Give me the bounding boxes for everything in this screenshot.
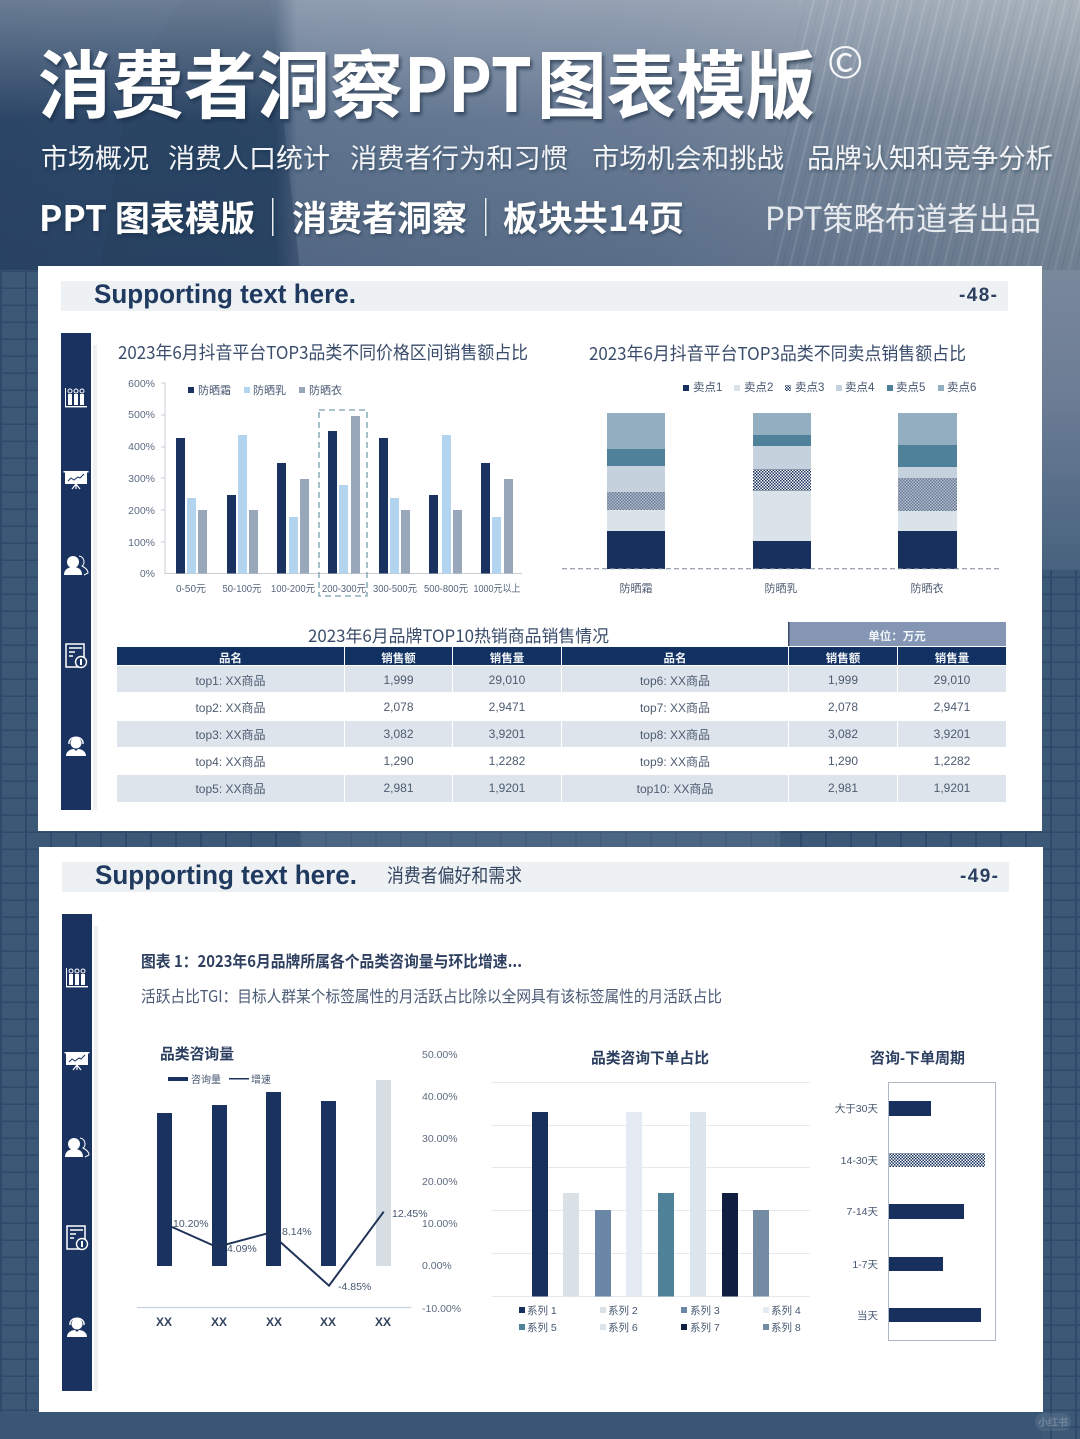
table: top 10 products: top8: XX商品 [640,727,710,742]
table: top 10 products: 1,999 [828,673,858,687]
combo chart: category inquiries: XX [156,1315,172,1329]
stacked bar chart: selling points share: 防晒衣 [910,581,944,595]
combo chart: category inquiries: -10.00% [422,1303,461,1315]
slide header bar [62,860,1009,892]
legend: 系列 3 [690,1304,720,1317]
legend: 卖点6 [947,381,976,394]
title: 图表模版 [537,27,815,134]
tagline: 消费者洞察 [292,191,467,242]
unit label: 单位：万元 [868,629,926,643]
chart title: selling points: 2023年6月抖音平台TOP3品类不同卖点销售额占比 [589,340,966,366]
horizontal bar chart: inquiry to order cycle: 7-14天 [846,1206,878,1218]
table: top 10 products: 1,2282 [489,754,526,768]
table: top 10 products: 1,9201 [489,781,526,795]
legend: 系列 1 [527,1304,557,1317]
table: top 10 products: 3,9201 [489,727,526,741]
legend: 系列 7 [690,1321,720,1334]
legend: 咨询量 [191,1073,221,1086]
table: top 10 products: 1,290 [383,754,414,768]
combo chart: category inquiries: XX [320,1315,336,1329]
legend: 系列 2 [608,1304,638,1317]
table: top 10 products: 3,082 [828,727,858,741]
legend: 卖点2 [744,381,773,394]
slide header bar: -48- [959,285,997,306]
legend [168,1073,271,1086]
legend: 系列 6 [608,1321,638,1334]
table: top 10 products: 1,2282 [934,754,971,768]
title [38,27,815,134]
bar chart: price range share: 200% [128,505,155,517]
table: top 10 products: top2: XX商品 [195,700,266,715]
horizontal bar chart: inquiry to order cycle: 大于30天 [835,1102,878,1115]
stacked bar chart: selling points share [562,381,1000,595]
table: top 10 products: 销售量 [490,651,525,665]
bar chart: price range share: 0% [140,568,155,580]
table: top 10 products: 3,9201 [934,727,971,741]
table: top 10 products: top10: XX商品 [637,781,713,796]
bar chart: price range share: 500% [128,409,155,421]
unit label [788,622,1006,646]
stacked bar chart: selling points share: 防晒乳 [764,581,798,595]
table: top 10 products: top5: XX商品 [195,781,266,796]
table: top 10 products: top9: XX商品 [640,754,710,769]
panel: slide 48 [38,266,1042,831]
combo chart: category inquiries: 4.09% [227,1243,257,1255]
combo chart: category inquiries [137,1045,461,1329]
table: top 10 products: 1,999 [383,673,414,687]
horizontal bar chart: inquiry to order cycle [835,1049,996,1340]
legend: 系列 5 [527,1321,557,1334]
table: top 10 products: top6: XX商品 [640,673,710,688]
bar chart: price range share: 300-500元 [373,584,417,595]
legend: 防晒衣 [309,383,342,397]
tagline [39,191,684,242]
combo chart: category inquiries: XX [375,1315,391,1329]
combo chart: category inquiries: XX [266,1315,282,1329]
legend: 防晒霜 [198,383,231,397]
subtitle: section list: 消费者行为和习惯 [350,137,568,176]
subtitle: section list: 市场机会和挑战 [592,137,784,176]
legend: 卖点1 [693,381,722,394]
legend: 系列 8 [771,1321,801,1334]
sidebar with icons [61,333,97,810]
bar chart: price range share: 400% [128,441,155,453]
bar chart: price range share: 50-100元 [222,584,262,595]
combo chart: category inquiries: 8.14% [282,1226,312,1238]
table: top 10 products: 3,082 [383,727,414,741]
combo chart: category inquiries: 10.00% [422,1218,458,1230]
table: top 10 products: 品名 [664,651,686,665]
horizontal bar chart: inquiry to order cycle: 咨询-下单周期 [870,1049,965,1067]
horizontal bar chart: inquiry to order cycle: 当天 [857,1309,878,1322]
combo chart: category inquiries: 40.00% [422,1091,458,1103]
legend [519,1304,801,1334]
legend: 系列 4 [771,1304,801,1317]
table: top 10 products: 销售额 [381,651,416,665]
bar chart: inquiry order share: 品类咨询下单占比 [591,1049,709,1067]
tagline: PPT 图表模版 [39,191,255,242]
combo chart: category inquiries: 品类咨询量 [160,1045,234,1063]
table: top 10 products: top1: XX商品 [195,673,266,688]
table: top 10 products: top3: XX商品 [195,727,266,742]
combo chart: category inquiries: 20.00% [422,1176,458,1188]
legend [683,381,976,394]
title: 消费者洞察 [38,27,403,134]
chart heading: 图表 1：2023年6月品牌所属各个品类咨询量与环比增速... [141,948,522,972]
table: top 10 products: 销售量 [935,651,970,665]
combo chart: category inquiries: XX [211,1315,227,1329]
table: top 10 products: 1,9201 [934,781,971,795]
combo chart: category inquiries: 0.00% [422,1260,452,1272]
table: top 10 products: 29,010 [489,673,526,687]
bar chart: price range share: 300% [128,473,155,485]
slide header bar: -49- [960,866,998,887]
sidebar with icons [62,914,98,1391]
tagline: 板块共14页 [503,191,684,242]
description text: 活跃占比TGI：目标人群某个标签属性的月活跃占比除以全网具有该标签属性的月活跃占比 [141,983,722,1007]
table: top 10 products: 2,078 [828,700,858,714]
bar chart: price range share: 600% [128,378,155,390]
chart title: price range: 2023年6月抖音平台TOP3品类不同价格区间销售额占比 [118,339,528,365]
copyright mark: © [827,27,864,91]
table: top 10 products: 1,290 [828,754,858,768]
subtitle: section list: 市场概况 [41,137,149,176]
bar chart: inquiry order share [492,1049,810,1334]
table: top 10 products: 品名 [219,651,242,665]
table: top 10 products [117,647,1006,802]
bar chart: price range share: 500-800元 [424,584,468,595]
legend: 卖点4 [845,381,875,394]
table: top 10 products: 销售额 [826,651,861,665]
table: top 10 products: 2,981 [828,781,858,795]
table: top 10 products: 29,010 [934,673,971,687]
legend: 卖点3 [795,381,824,394]
panel: slide 49 [39,847,1043,1412]
table title: 2023年6月品牌TOP10热销商品销售情况 [308,622,609,647]
publisher credit: PPT策略布道者出品 [765,194,1041,240]
combo chart: category inquiries: 12.45% [392,1208,428,1220]
combo chart: category inquiries: 10.20% [173,1218,209,1230]
bar chart: price range share: 1000元以上 [474,583,520,595]
watermark [1035,1413,1071,1431]
legend: 增速 [251,1073,271,1086]
table: top 10 products: top4: XX商品 [195,754,266,769]
slide header bar: Supporting text here. [94,279,356,309]
subtitle: section list [41,137,1053,176]
table: top 10 products: 2,078 [383,700,414,714]
combo chart: category inquiries: 50.00% [422,1049,458,1061]
combo chart: category inquiries: 30.00% [422,1133,458,1145]
legend: 卖点5 [896,381,925,394]
horizontal bar chart: inquiry to order cycle: 1-7天 [852,1259,878,1271]
stacked bar chart: selling points share: 防晒霜 [620,581,652,595]
table: top 10 products: 2,9471 [934,700,971,714]
table: top 10 products: 2,981 [383,781,414,795]
legend [188,383,342,397]
slide header bar: Supporting text here. [95,860,357,890]
table: top 10 products: top7: XX商品 [640,700,710,715]
subtitle: section list: 消费人口统计 [168,137,330,176]
slide header bar [61,279,1008,311]
bar chart: price range share: 100-200元 [271,584,315,595]
subtitle: section list: 品牌认知和竞争分析 [807,137,1053,176]
legend: 防晒乳 [253,383,286,397]
table: top 10 products: 2,9471 [489,700,526,714]
bar chart: price range share: 100% [128,537,155,549]
title: PPT [404,27,532,134]
bar chart: price range share: 0-50元 [176,584,206,595]
horizontal bar chart: inquiry to order cycle: 14-30天 [841,1155,878,1167]
bar chart: price range share: 200-300元 [322,584,366,595]
bar chart: price range share [128,378,522,596]
slide header bar: 消费者偏好和需求 [387,861,522,888]
watermark: 小红书 [1038,1416,1068,1429]
combo chart: category inquiries: -4.85% [338,1281,371,1293]
